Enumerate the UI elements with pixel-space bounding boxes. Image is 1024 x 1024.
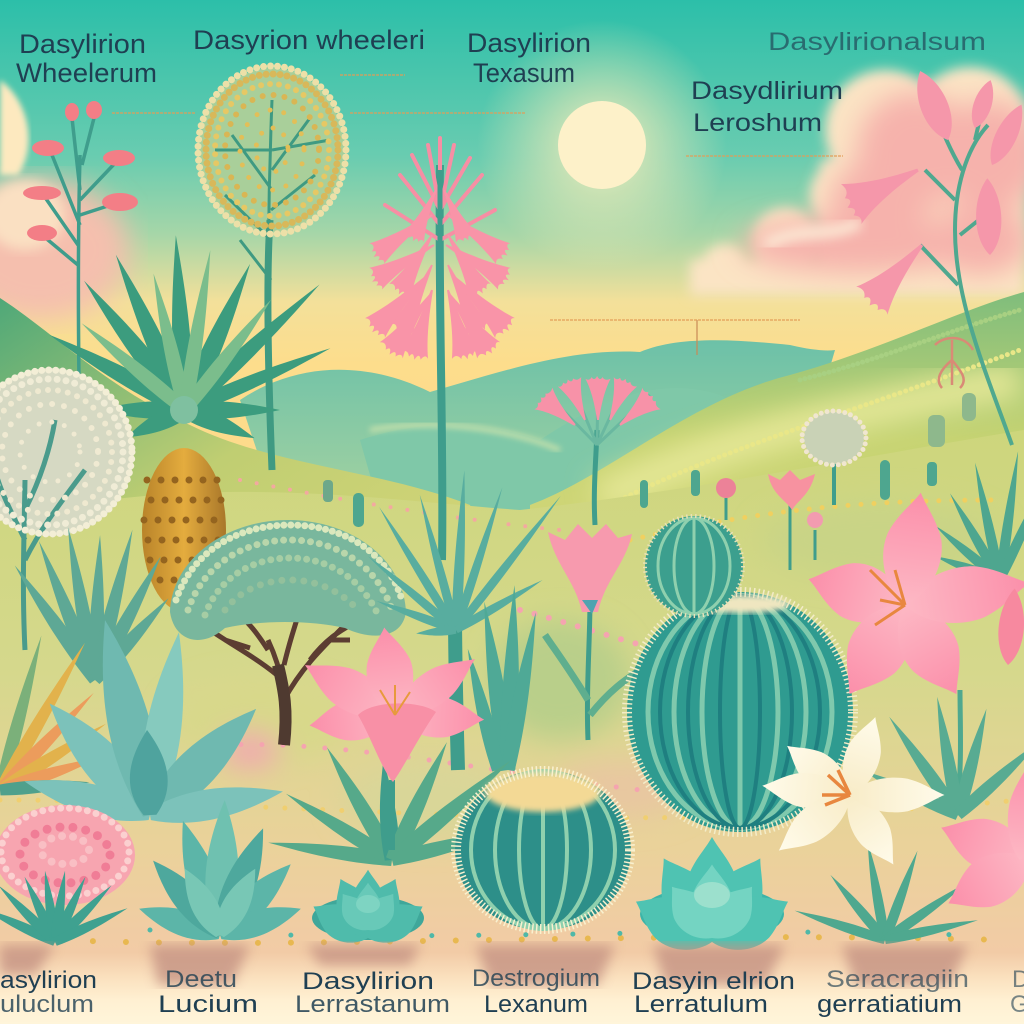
top label: Dasylirion Texasum	[467, 28, 591, 88]
bottom label: Deetu Lucium: Deetu	[165, 966, 237, 993]
meadow colour blotches	[170, 500, 1000, 840]
top label: Dasydlirium Leroshum: Leroshum	[693, 109, 822, 137]
plant: dome canopy tree	[170, 520, 406, 745]
plant: teal rosette succulent	[305, 870, 431, 953]
top label: Dasylirion Texasum: Dasylirion	[467, 28, 591, 58]
bottom label: Seracragiin gerratiatium: gerratiatium	[817, 991, 962, 1018]
left green hillside	[0, 298, 520, 640]
cloud: left pink cloud	[0, 80, 130, 320]
bottom label: asylirion uluclum: asylirion	[0, 967, 97, 994]
bottom label: Dasylirion Lerrastanum: Dasylirion	[302, 968, 434, 995]
top label: Dasyrion wheeleri: Dasyrion wheeleri	[193, 25, 425, 55]
top label: Dasylirion Texasum: Texasum	[473, 58, 575, 88]
plant: central spiky teal agave on stem	[365, 470, 564, 770]
meadow ground	[0, 430, 1024, 1024]
top label: Dasylirion Wheelerum: Wheelerum	[16, 58, 157, 88]
plant: blue-grey agave	[20, 615, 286, 830]
far teal hills	[240, 340, 835, 520]
bottom label: Seracragiin gerratiatium	[817, 966, 969, 1018]
plant: large barrel cactus	[627, 592, 853, 832]
plant: top right pink lily stalk	[837, 66, 1024, 445]
plant: small round cream tree	[802, 411, 866, 505]
top label: Dasydlirium Leroshum	[691, 77, 843, 137]
ground shadows under labels	[0, 945, 968, 985]
plant: bottom barrel cactus	[455, 770, 631, 930]
sky background	[0, 0, 1024, 520]
lines: leader line marks	[112, 75, 843, 355]
bottom label: Destrogium Lexanum: Destrogium	[472, 965, 600, 992]
plant: small pink meadow flowers	[716, 470, 823, 570]
bottom label: Dasylirion Lerrastanum	[295, 968, 450, 1018]
bottom label: Destrogium Lexanum	[472, 965, 600, 1018]
plant: tall pink flower spike	[362, 138, 518, 560]
plant: central pink lily with leaves	[267, 625, 516, 867]
plant: teal spiky succulent	[135, 800, 305, 947]
top label: Dasylirion Wheelerum: Dasylirion	[19, 29, 146, 59]
right green hillside	[530, 292, 1024, 620]
bottom label: asylirion uluclum	[0, 967, 97, 1018]
top label: Dasylirionalsum: Dasylirionalsum	[768, 28, 986, 56]
plant: pink flowering bush	[0, 805, 135, 947]
plant: far right pink lily	[933, 762, 1024, 925]
plant: right green grass clump	[932, 451, 1024, 585]
top label: Dasydlirium Leroshum: Dasydlirium	[691, 77, 843, 105]
plant: far pink flower on stem	[532, 374, 663, 525]
cloud: right pink cloud	[690, 67, 1024, 295]
plant: turquoise rosette succulent	[624, 837, 800, 964]
plant: white lily	[760, 712, 979, 945]
plant: yucca with golden trunk	[45, 235, 333, 612]
plant: small barrel cactus	[645, 516, 743, 616]
plant: left edge orange palm	[0, 634, 109, 797]
bottom label: asylirion uluclum: uluclum	[0, 991, 94, 1018]
bottom label: clipped right edge	[1010, 966, 1024, 1018]
small pink orchid sketch	[935, 338, 973, 388]
plant: tall teal blades	[461, 585, 544, 772]
bottom label: Deetu Lucium: Lucium	[158, 991, 258, 1018]
plant: spiky teal shrub left	[9, 526, 174, 685]
bottom label: Seracragiin gerratiatium: Seracragiin	[826, 966, 969, 993]
bottom label: Dasyin elrion Lerratulum: Lerratulum	[634, 991, 768, 1018]
plant: pink trumpet flower on stem	[545, 524, 640, 740]
plant: white round flowering tree	[0, 368, 134, 650]
plant: left pink flower stalk	[23, 101, 138, 380]
bottom label: Dasylirion Lerrastanum: Lerrastanum	[295, 991, 450, 1018]
bottom label: Dasyin elrion Lerratulum	[632, 968, 795, 1018]
bottom label: Deetu Lucium	[158, 966, 258, 1018]
meadow flower speckle	[0, 480, 1020, 943]
top label: Dasylirion Wheelerum	[16, 29, 157, 88]
plant: round flowering tree	[198, 66, 346, 470]
bottom label: Destrogium Lexanum: Lexanum	[484, 991, 588, 1018]
bottom label: Dasyin elrion Lerratulum: Dasyin elrion	[632, 968, 795, 995]
plant: big pink lily right	[801, 489, 1024, 821]
sun	[477, 20, 727, 270]
small distant cacti	[323, 393, 976, 527]
